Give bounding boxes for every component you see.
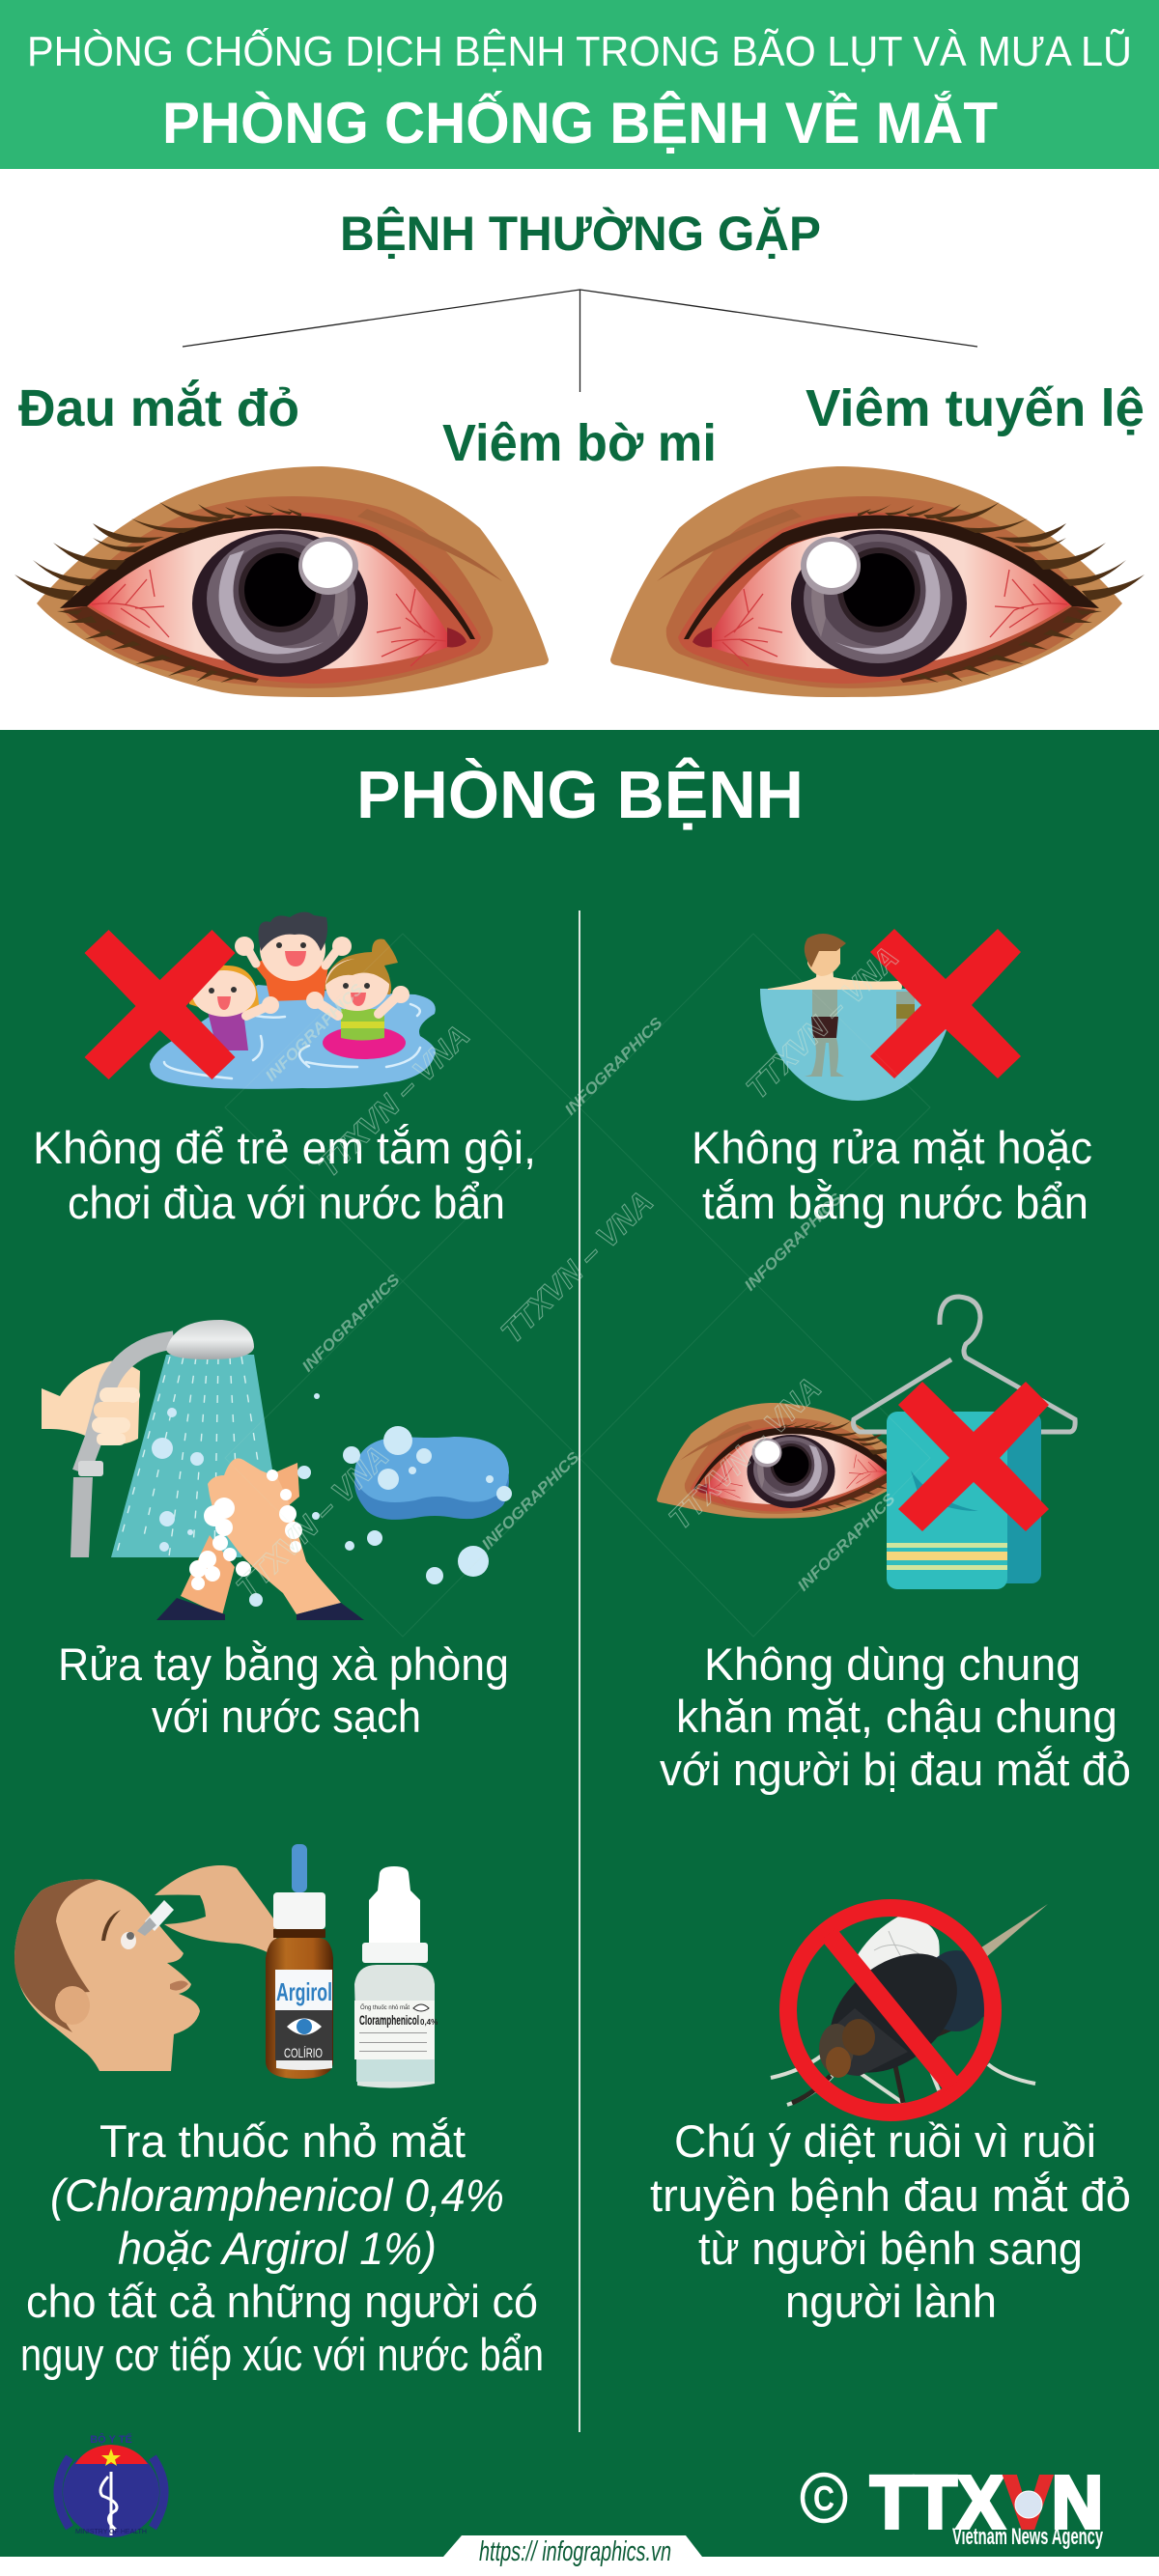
- text: kill flies: Chú ý diệt ruồi vì ruồi: [674, 2115, 1096, 2167]
- text: apply eye drops: [20, 2115, 544, 2380]
- hanger: [854, 1297, 1075, 1432]
- text: do not let children bathe: [33, 1122, 536, 1228]
- header band: [0, 0, 1159, 169]
- white bottle: Ống thuốc nhỏ mắt: [360, 2004, 410, 2011]
- header title line 2: PHÒNG CHỐNG BỆNH VỀ MẮT: [162, 91, 998, 155]
- text: do not share towels: với người bị đau mắt đỏ: [660, 1744, 1131, 1795]
- text: do not wash face in dirty water: Không rửa mặt hoặc: [692, 1122, 1092, 1173]
- watermarks: TTXVN – VNA: [739, 939, 905, 1106]
- icon: left red eye: [14, 466, 549, 697]
- shower head: [166, 1320, 254, 1359]
- footer url: https:// infographics.vn: [479, 2536, 671, 2567]
- disease label: blepharitis: Viêm bờ mi: [442, 414, 717, 472]
- white bottle: [354, 1866, 438, 2088]
- fly abdomen: [921, 1950, 991, 2031]
- text: kill flies: người lành: [785, 2276, 997, 2327]
- towel front: [887, 1412, 1007, 1589]
- text: apply eye drops: (Chloramphenicol 0,4%: [50, 2170, 504, 2221]
- girl right: [306, 939, 410, 1059]
- text: wash hands with soap: Rửa tay bằng xà phòng: [58, 1638, 509, 1690]
- fly thorax: [806, 1929, 980, 2097]
- watermarks: INFOGRAPHICS: [299, 1272, 404, 1376]
- disease label: red eye: Đau mắt đỏ: [18, 379, 299, 437]
- text: do not let children bathe: Không để trẻ em tắm gội,: [33, 1122, 536, 1173]
- text: kill flies: [650, 2115, 1131, 2327]
- icon: fly in prohibition sign: [771, 1904, 1048, 2113]
- text: apply eye drops: hoặc Argirol 1%): [118, 2223, 437, 2274]
- text: do not wash face in dirty water: [692, 1122, 1092, 1228]
- red cross: [85, 930, 236, 1079]
- connector lines to the three diseases: [183, 290, 977, 392]
- star: [101, 2449, 121, 2466]
- disease label: dacryoadenitis: Viêm tuyến lệ: [806, 379, 1145, 437]
- watermarks: INFOGRAPHICS: [742, 1190, 846, 1295]
- boy: [235, 911, 352, 1001]
- footer tab: [0, 2535, 1159, 2576]
- amber bottle: COLÍRIO: [284, 2045, 323, 2060]
- red cross: [898, 1382, 1049, 1531]
- column divider: [579, 910, 580, 2432]
- globe: [1015, 2491, 1042, 2518]
- icon: right red eye: [610, 466, 1145, 697]
- icon: children playing in dirty water, crossed out: [85, 911, 436, 1089]
- amber bottle: Argirol: [276, 1977, 332, 2006]
- white bottle: Cloramphenicol: [359, 2012, 419, 2028]
- watermarks: INFOGRAPHICS: [795, 1491, 899, 1595]
- prohibition ring: [788, 1908, 993, 2113]
- washing hands: [275, 1463, 299, 1506]
- icon: man applying eye drops and two bottles: [14, 1844, 438, 2088]
- watermarks: [229, 939, 905, 1605]
- hand: [155, 1865, 280, 1960]
- text: apply eye drops: Tra thuốc nhỏ mắt: [99, 2115, 466, 2167]
- watermarks: INFOGRAPHICS: [562, 1015, 666, 1119]
- logo: ministry of health: BỘ Y TẾ: [90, 2433, 132, 2446]
- watermarks: TTXVN – VNA: [310, 1018, 476, 1184]
- watermarks: TTXVN – VNA: [229, 1439, 395, 1605]
- logo: copyright and TTXVN: C: [813, 2478, 834, 2518]
- soap bubbles: [152, 1393, 512, 1607]
- white bottle: 0,4%: [420, 2018, 438, 2027]
- shower hose and handle: [71, 1477, 93, 1557]
- text: apply eye drops: nguy cơ tiếp xúc với nước bẩn: [20, 2329, 544, 2380]
- logo: ministry of health: [58, 2433, 164, 2537]
- icon: man in dirty water, crossed out: [760, 929, 1021, 1101]
- text: do not share towels: Không dùng chung: [704, 1638, 1081, 1690]
- towel back: [966, 1413, 1041, 1583]
- hair: [14, 1879, 99, 2032]
- holding fingers: [99, 1387, 140, 1403]
- watermarks: TTXVN – VNA: [494, 1184, 660, 1350]
- text: do not wash face in dirty water: tắm bằng nước bẩn: [702, 1177, 1088, 1228]
- prohibition slash: [829, 1934, 952, 2086]
- text: wash hands with soap: [58, 1638, 509, 1742]
- icon: eye beside shared towel, crossed out: [657, 1297, 1075, 1589]
- dropper: [145, 1900, 174, 1931]
- fly rod: [915, 1904, 1048, 2001]
- watermarks: INFOGRAPHICS: [479, 1449, 583, 1554]
- fly head: [819, 2024, 854, 2074]
- holding hand palm: [42, 1359, 140, 1444]
- watermarks: INFOGRAPHICS: [263, 981, 367, 1085]
- text: apply eye drops: cho tất cả những người có: [26, 2276, 538, 2327]
- icon: washing hands with soap under shower: [42, 1320, 512, 1620]
- text: wash hands with soap: với nước sạch: [152, 1691, 421, 1742]
- logo: ministry of health: MINISTRY OF HEALTH: [75, 2529, 147, 2535]
- small red eye: [657, 1403, 923, 1518]
- foam: [189, 1470, 302, 1590]
- panel: prevention background: [0, 730, 1159, 2557]
- text: do not share towels: [660, 1638, 1131, 1795]
- eyebrow and eye: [101, 1910, 121, 1941]
- text: kill flies: từ người bệnh sang: [698, 2223, 1083, 2274]
- fly legs: [771, 2013, 1035, 2105]
- TTXVN wordmark: TTXVN: [870, 2461, 1103, 2544]
- text: do not share towels: khăn mặt, chậu chung: [676, 1691, 1117, 1742]
- sponge: [354, 1439, 509, 1520]
- girl left: [189, 966, 279, 1050]
- copyright mark: [803, 2475, 845, 2521]
- sleeves: [156, 1598, 364, 1620]
- text: kill flies: truyền bệnh đau mắt đỏ: [650, 2170, 1131, 2221]
- amber bottle: [266, 1844, 333, 2079]
- watermarks: TTXVN – VNA: [662, 1370, 828, 1536]
- face: [14, 1879, 200, 2071]
- fly wing: [850, 1917, 940, 1989]
- heading: common diseases: BỆNH THƯỜNG GẶP: [340, 207, 821, 261]
- logo: copyright and TTXVN: [803, 2461, 1103, 2550]
- heading: prevention: PHÒNG BỆNH: [356, 756, 804, 832]
- text: do not let children bathe: chơi đùa với nước bẩn: [68, 1177, 505, 1228]
- red cross: [870, 929, 1021, 1078]
- ear: [55, 1986, 90, 2025]
- rod and snake: [110, 2472, 112, 2535]
